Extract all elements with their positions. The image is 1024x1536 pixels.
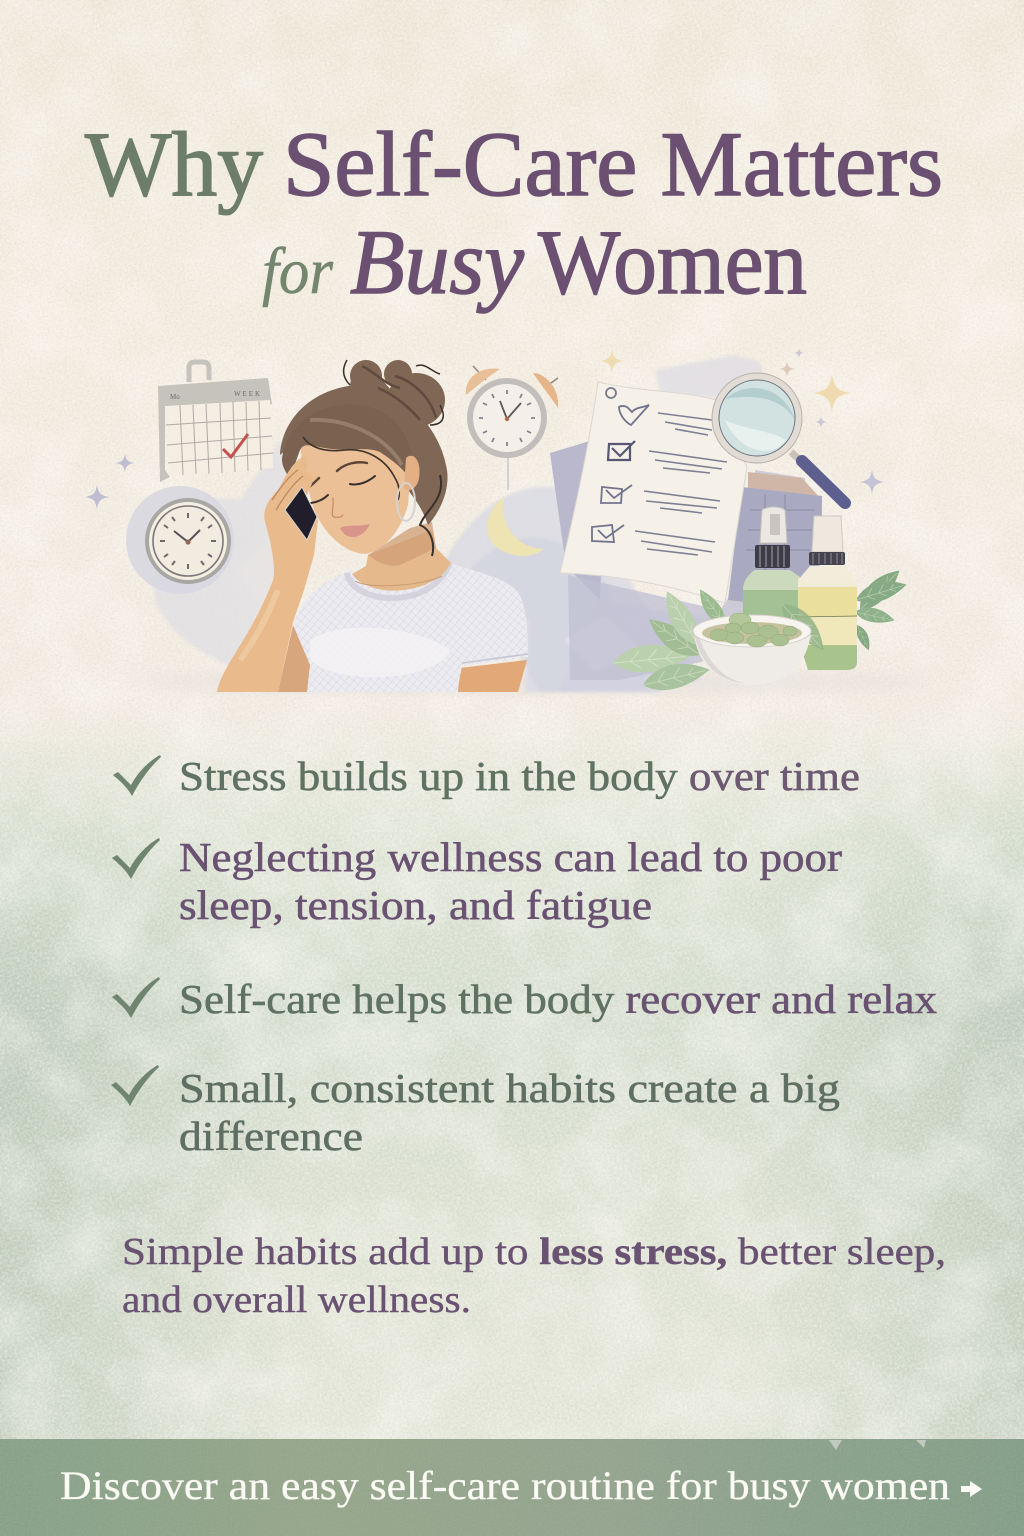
summary text — [122, 1231, 946, 1321]
icon: wall calendar: Mo — [170, 393, 180, 401]
icon: wall calendar: WEEK — [234, 390, 260, 398]
title line 2 — [262, 211, 807, 313]
body and shirt — [293, 563, 528, 692]
check icon 3 — [112, 977, 160, 1018]
woman — [217, 360, 528, 692]
lavender background shapes — [130, 355, 930, 694]
call-to-action banner: Discover an easy self-care routine for busy women — [60, 1463, 950, 1508]
reason 4: difference — [179, 1113, 363, 1159]
reason 2: Neglecting wellness can lead to poor — [179, 834, 842, 880]
icon: magnifying glass — [712, 373, 845, 503]
reason 1: Stress builds up in the body over time — [179, 753, 860, 799]
back hair and bun — [280, 360, 448, 525]
title line 2: for — [262, 235, 333, 308]
checklist lines — [635, 413, 727, 555]
herb pellets — [710, 613, 797, 647]
icon: round wall clock — [126, 486, 234, 594]
icon: alarm clock — [466, 366, 558, 490]
mouth — [340, 524, 370, 537]
leaves — [612, 563, 909, 695]
title line 1: Why — [85, 113, 263, 215]
reason 2: sleep, tension, and fatigue — [179, 882, 652, 928]
reason 4 — [111, 1065, 840, 1159]
check icon 4 — [111, 1065, 159, 1106]
icon: wall calendar — [158, 362, 273, 482]
title line 2: Women — [538, 211, 807, 313]
green dropper bottle — [743, 507, 804, 640]
reason 4: Small, consistent habits create a big — [179, 1065, 840, 1111]
title line 1: Self-Care Matters — [283, 113, 943, 215]
icon: crescent moon — [487, 497, 544, 556]
hair front — [282, 404, 413, 482]
title line 2: Busy — [350, 211, 524, 313]
icon: arrow — [961, 1481, 982, 1497]
face details — [308, 462, 375, 517]
reason 2 — [112, 834, 842, 928]
summary text: Simple habits add up to less stress, better sleep, — [122, 1231, 946, 1273]
ear and earring — [404, 456, 420, 490]
phone — [285, 487, 317, 540]
check icon 1 — [113, 755, 161, 796]
checklist paper — [560, 382, 747, 603]
summary text: and overall wellness. — [122, 1279, 471, 1321]
back papers — [550, 436, 822, 680]
call-to-action banner — [0, 1439, 1024, 1536]
title — [85, 113, 943, 313]
checklist of reasons — [111, 753, 937, 1159]
reason 3: Self-care helps the body recover and relax — [179, 976, 937, 1022]
herb bowl — [693, 613, 811, 685]
raised forearm and hand — [217, 456, 318, 692]
neck — [352, 530, 451, 591]
yellow dropper bottle — [798, 516, 857, 670]
check icon 2 — [112, 838, 160, 879]
overlapping leaf — [775, 596, 832, 657]
illustration: stressed woman and self-care items — [84, 348, 930, 695]
face — [300, 437, 411, 554]
checklist marks — [592, 405, 649, 542]
sparkles — [84, 348, 884, 510]
